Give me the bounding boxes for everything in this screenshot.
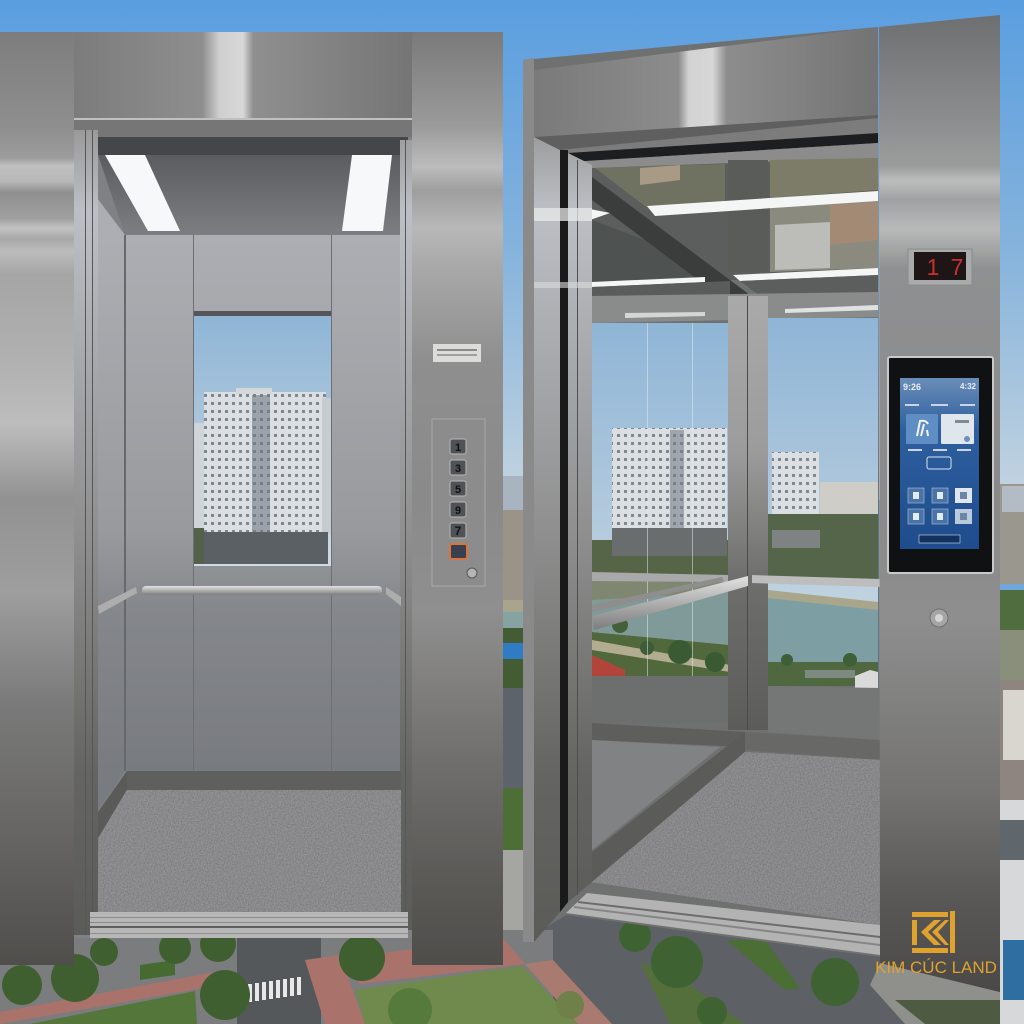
button 3: 3 (455, 463, 461, 475)
sky background (0, 0, 1024, 500)
lower glass panels (592, 676, 728, 723)
left window (592, 323, 730, 723)
door sill (566, 893, 880, 955)
notice plate (433, 344, 481, 362)
ceiling light strips (590, 191, 878, 287)
button 7: 7 (455, 524, 462, 538)
button panel (432, 419, 485, 586)
button 7 (450, 523, 466, 538)
logo (875, 911, 997, 977)
brand name: KIM CÚC LAND (875, 958, 997, 977)
kick plate (592, 732, 745, 882)
city view between and beside the elevators (500, 476, 1024, 1024)
button 9: 9 (455, 505, 461, 517)
header panel (534, 27, 878, 137)
crosswalk (248, 977, 301, 1002)
clock text: 9:26 (903, 382, 921, 392)
info card (906, 414, 938, 444)
floor indicator (908, 249, 972, 285)
button 3 (450, 460, 466, 475)
central post (728, 296, 768, 730)
kick plate (127, 771, 401, 791)
right elevator (523, 15, 1000, 992)
right column (412, 32, 503, 965)
door sill (90, 912, 408, 938)
left door jamb (74, 130, 98, 935)
speckled floor (98, 790, 401, 912)
header panel (74, 32, 412, 120)
ceiling reflection (590, 158, 878, 323)
button 5 (450, 481, 466, 496)
upper frame and black door line (560, 115, 878, 153)
door jamb (523, 58, 878, 942)
button 1 (450, 439, 466, 454)
diagonal ceiling beam (592, 177, 750, 295)
bottom bar (919, 535, 960, 543)
floor indicator: 1 (927, 254, 939, 280)
window with building (194, 311, 331, 566)
speckled floor (592, 752, 880, 925)
touch panel (888, 357, 993, 573)
left column (0, 32, 74, 965)
screen (900, 378, 979, 549)
alarm button (450, 544, 467, 559)
right door jamb (400, 140, 412, 930)
touch panel: 4:32 (960, 382, 977, 391)
key switch (930, 609, 948, 627)
ceiling lights (105, 155, 392, 231)
handrail (98, 586, 401, 614)
key switch (467, 568, 477, 578)
interior base (74, 120, 412, 938)
logo mark (912, 911, 955, 953)
icon buttons (908, 488, 972, 524)
button 1: 1 (455, 442, 461, 454)
ground below left elevator (0, 926, 612, 1024)
button 9 (450, 502, 466, 517)
handrails (592, 572, 880, 630)
ceiling (98, 155, 405, 235)
ground below right elevator (540, 915, 1000, 1024)
right window (768, 318, 878, 688)
side wall (97, 198, 125, 812)
floor indicator: 7 (951, 254, 963, 280)
map card (941, 414, 974, 444)
left elevator (0, 32, 503, 965)
button 5: 5 (455, 484, 461, 496)
right column (879, 15, 1000, 992)
interior base (523, 27, 880, 957)
call button (927, 457, 951, 469)
back wall panels (125, 235, 401, 771)
